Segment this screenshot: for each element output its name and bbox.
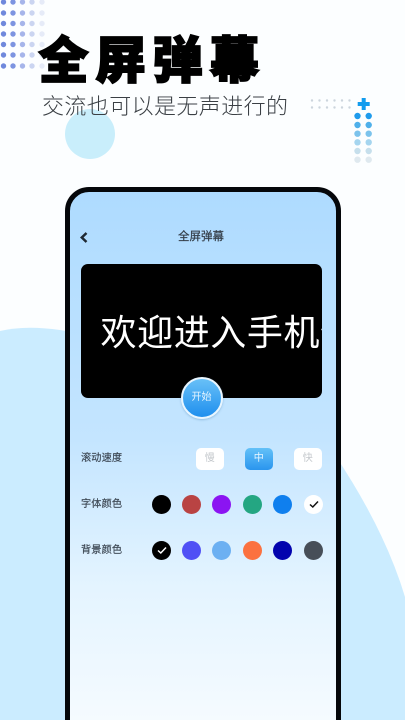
start button: 开始 bbox=[192, 392, 212, 403]
back arrow bbox=[80, 232, 88, 243]
decorative circle bbox=[65, 109, 115, 159]
label: scroll speed: 滚动速度 bbox=[81, 452, 122, 464]
speed: medium (selected): 中 bbox=[254, 452, 264, 464]
speed: medium (selected) bbox=[244, 448, 273, 470]
dot grid: top right bbox=[310, 98, 372, 163]
subtitle: 交流也可以是无声进行的 bbox=[42, 94, 288, 119]
label: font colour: 字体颜色 bbox=[81, 498, 122, 510]
speed: fast bbox=[294, 448, 322, 470]
title: 全屏弹幕 bbox=[38, 33, 266, 89]
background colour swatches bbox=[152, 541, 323, 560]
speed: slow bbox=[196, 448, 224, 470]
speed: slow: 慢 bbox=[205, 452, 215, 464]
label: background colour: 背景颜色 bbox=[81, 544, 122, 556]
danmaku preview bbox=[80, 264, 322, 398]
speed: fast: 快 bbox=[303, 452, 313, 464]
phone mockup bbox=[65, 187, 340, 720]
font colour swatches bbox=[152, 495, 323, 514]
dot grid: top left bbox=[0, 0, 44, 69]
screen heading: 全屏弹幕 bbox=[178, 230, 224, 242]
start button bbox=[180, 377, 222, 419]
